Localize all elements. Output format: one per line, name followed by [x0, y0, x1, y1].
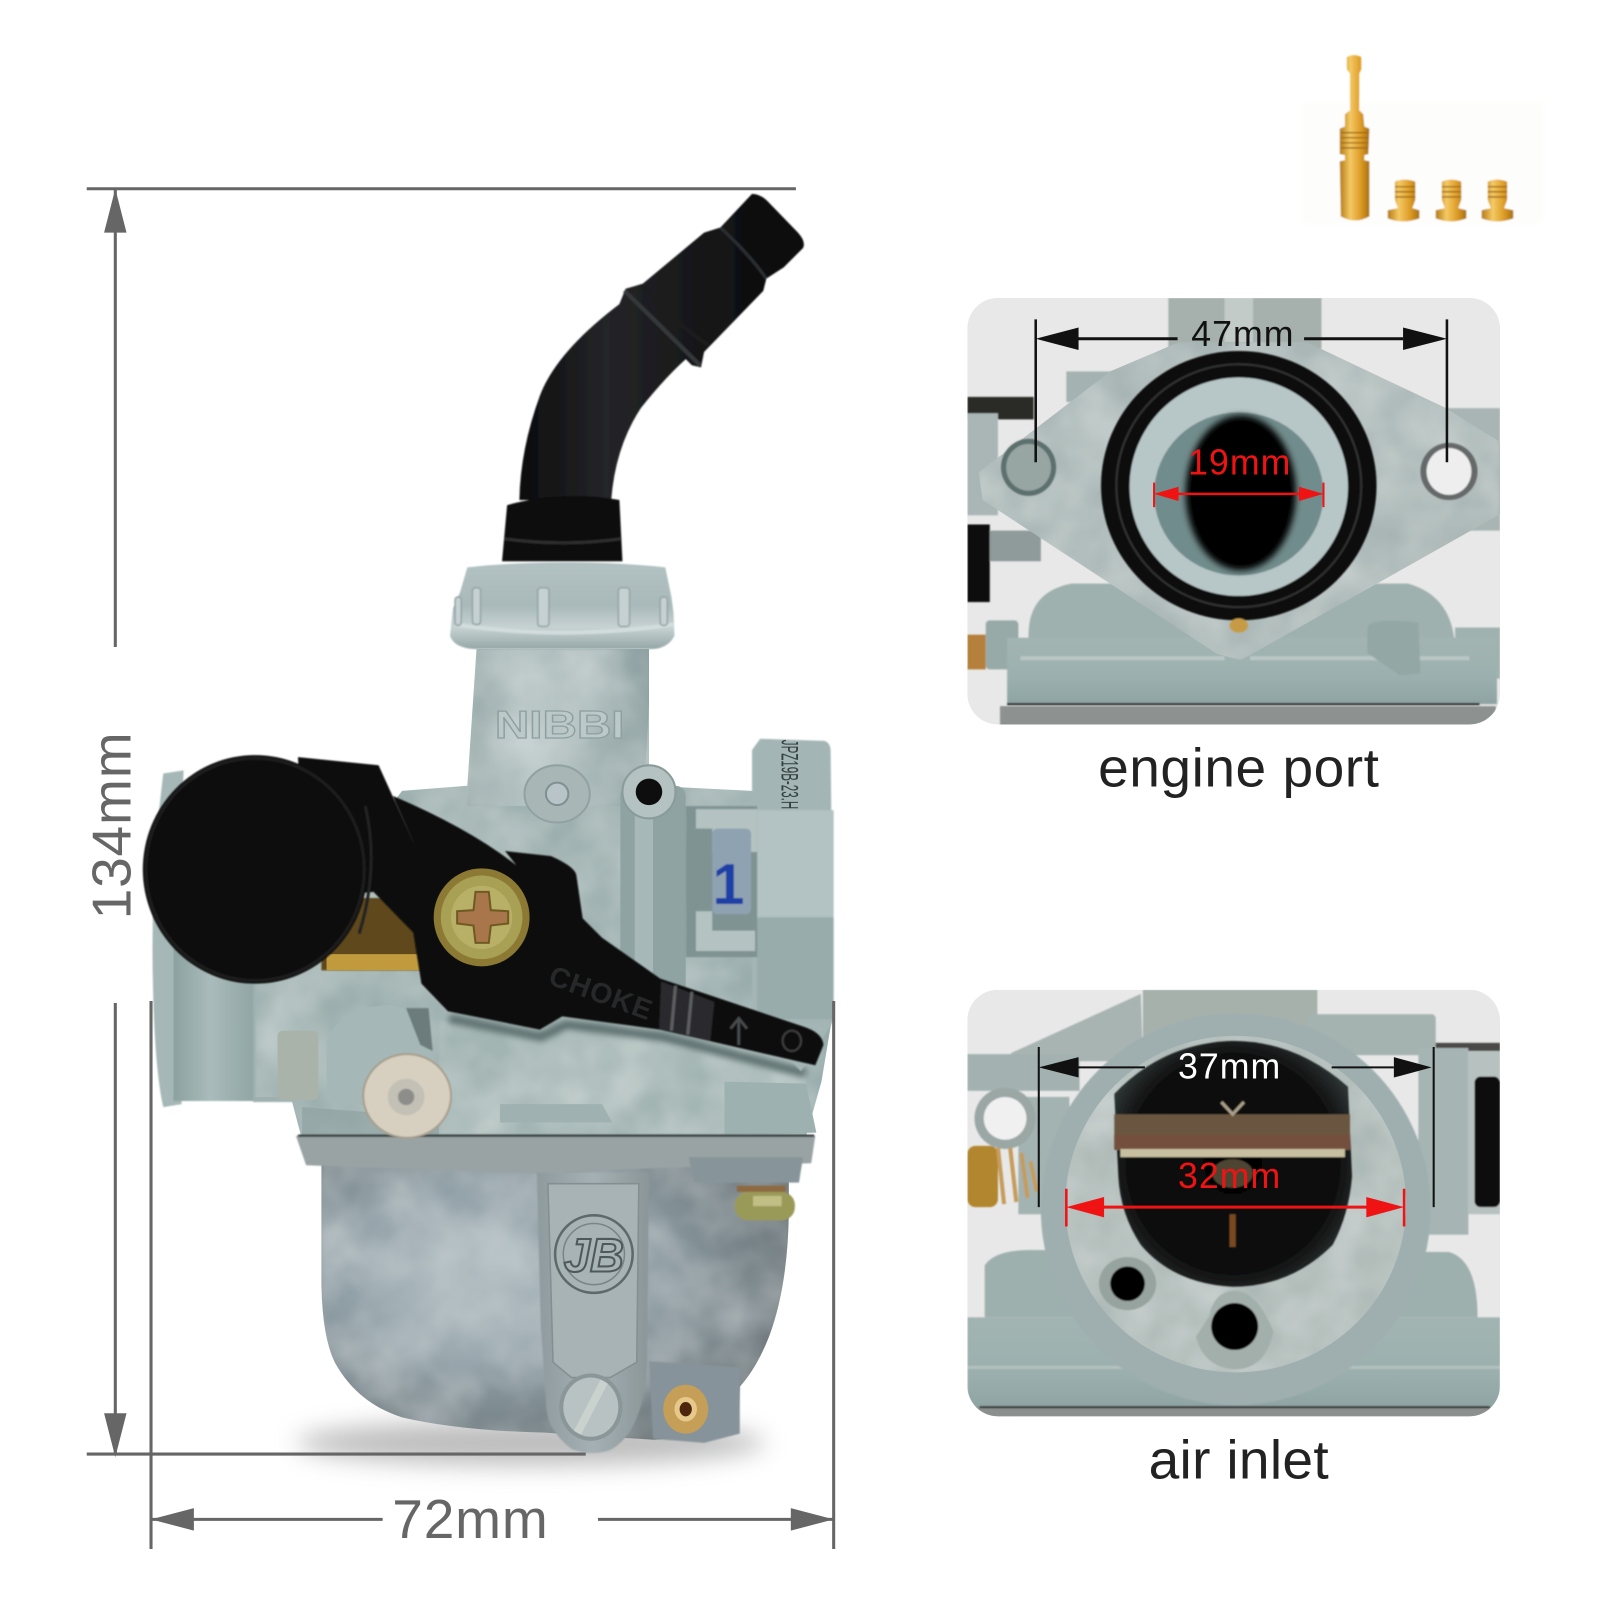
black fuel tube — [502, 194, 804, 561]
lower body ledge — [439, 1020, 806, 1135]
32mm dimension — [1066, 1156, 1404, 1227]
upper right casting — [1306, 1014, 1436, 1055]
boss with hole — [622, 765, 676, 818]
small side bolt — [735, 1186, 795, 1220]
right block — [1418, 1048, 1468, 1235]
throttle slide — [1114, 1114, 1350, 1149]
bore — [1154, 412, 1323, 576]
base — [967, 1317, 1500, 1409]
caption: engine port: engine port — [1098, 737, 1379, 799]
icon: brass jets set — [1302, 55, 1544, 224]
cap nut — [450, 562, 674, 649]
37mm dimension: 37mm — [1178, 1047, 1281, 1087]
19mm dimension: 19mm — [1188, 442, 1291, 482]
carburetor photo illustration — [143, 194, 834, 1465]
brass pin — [1230, 618, 1248, 633]
side strip left — [967, 1054, 1080, 1091]
47mm dimension — [1036, 314, 1447, 462]
inner face — [1130, 378, 1348, 596]
clear plastic plug — [363, 1054, 451, 1138]
inner face — [1065, 1036, 1406, 1372]
left air intake flange — [152, 770, 294, 1107]
vertical fuel passage — [620, 786, 686, 1020]
arrow: right — [791, 1508, 834, 1531]
lower bowl shoulders — [1028, 582, 1455, 638]
needle jet — [1230, 1214, 1236, 1247]
arrow: top — [104, 189, 127, 233]
arrow: bottom — [104, 1413, 127, 1457]
lever text: CHOKE — [545, 960, 657, 1027]
choke pivot screw — [434, 868, 530, 966]
right throttle block: 1 — [713, 853, 744, 917]
upper boss with screw — [524, 765, 590, 822]
arrow: left — [151, 1508, 194, 1531]
label: height: 134mm — [81, 732, 143, 919]
float bowl — [321, 1162, 789, 1440]
top tube — [1168, 298, 1321, 349]
carburetor photo illustration: JPZ19B-23.H — [776, 740, 803, 809]
lower shoulders — [985, 1250, 1478, 1317]
32mm dimension: 32mm — [1178, 1156, 1281, 1196]
elbow passage — [327, 1005, 439, 1112]
37mm dimension — [1039, 1047, 1434, 1207]
diamond flange — [979, 342, 1500, 660]
rim — [1041, 1013, 1431, 1405]
hex nut — [278, 1031, 318, 1100]
right throttle block — [686, 739, 834, 1071]
triangle casting — [1011, 994, 1143, 1061]
brass spring — [967, 1146, 998, 1207]
gasket flange — [296, 1136, 815, 1183]
neck — [467, 649, 649, 806]
embossed brand: NIBBI — [495, 704, 624, 747]
bolt hole left — [1001, 439, 1056, 496]
drain screw — [559, 1373, 622, 1441]
floor shadow — [296, 1420, 765, 1465]
jet holes — [1099, 1257, 1156, 1310]
height dimension — [81, 189, 796, 1457]
panel: air inlet — [967, 990, 1500, 1417]
side parts — [967, 397, 1034, 419]
o-ring — [1101, 351, 1377, 620]
label: width: 72mm — [392, 1488, 549, 1550]
main body casting — [255, 649, 832, 1136]
needle clip — [1221, 1102, 1244, 1114]
black choke knob and lever — [143, 755, 823, 1065]
panel: engine port — [967, 298, 1500, 727]
47mm dimension: 47mm — [1191, 314, 1294, 354]
drain strap with logo — [537, 1172, 740, 1453]
black knob edge — [1474, 1077, 1500, 1207]
lever cast shadow — [449, 1018, 806, 1073]
drain strap with logo: JB — [564, 1229, 624, 1281]
brass choke bracket — [321, 898, 420, 970]
top tube — [1142, 990, 1318, 1037]
eyelet ring — [974, 1088, 1036, 1149]
bolt hole right — [1420, 443, 1478, 500]
caption: air inlet: air inlet — [1149, 1429, 1329, 1491]
brass nipple — [663, 1385, 708, 1434]
width dimension — [151, 1001, 834, 1550]
19mm dimension — [1154, 442, 1323, 507]
throat — [1114, 1041, 1352, 1287]
